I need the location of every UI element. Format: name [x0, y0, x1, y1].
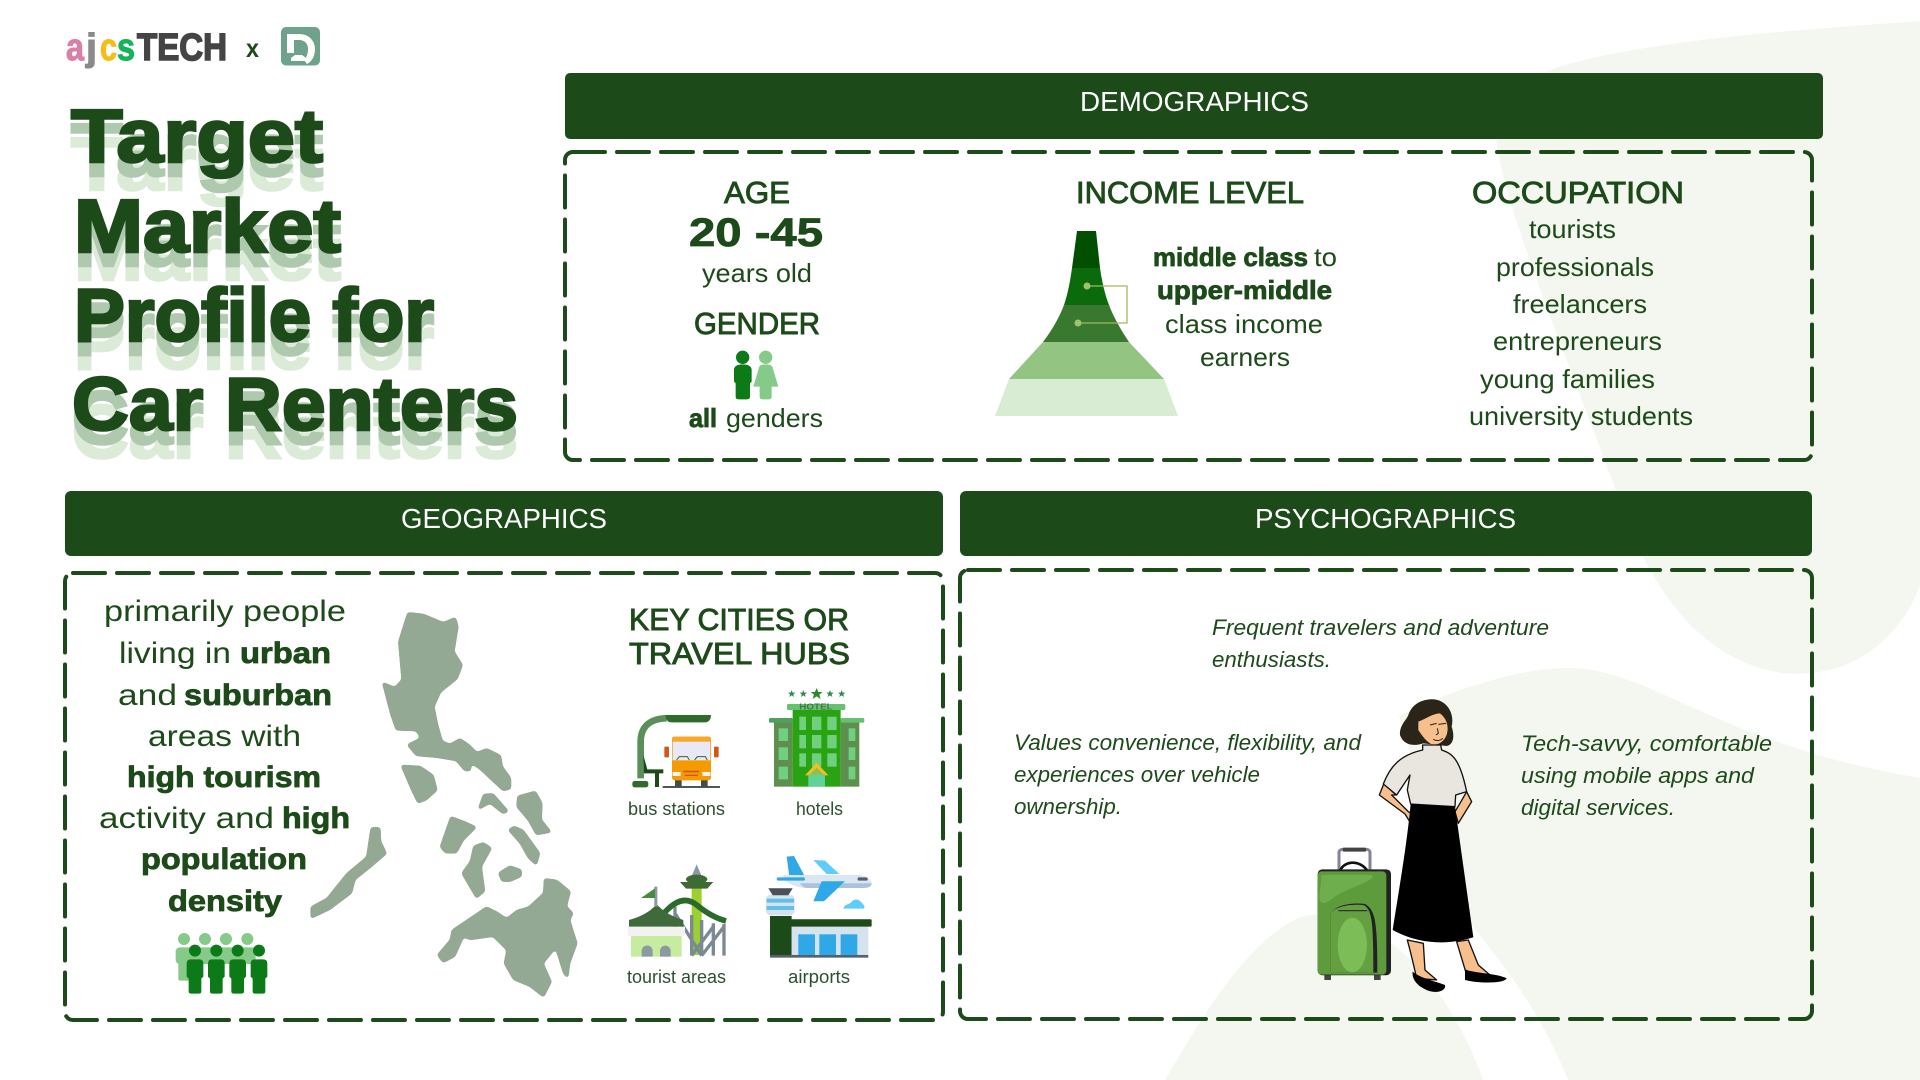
heading: psychographics [960, 491, 1812, 556]
heading: demographics: DEMOGRAPHICS [1080, 86, 1309, 117]
occupation block: tourists [1529, 214, 1616, 244]
income level block: to [1314, 242, 1337, 272]
gender block: GENDER [694, 306, 820, 341]
labels: travel hubs: bus stations [628, 799, 725, 819]
text block: where people live: and [118, 679, 177, 712]
title: Car Renters [72, 362, 518, 446]
logo: ajcsTECH x partner: s [117, 27, 135, 69]
panel: psychographics [960, 570, 1812, 1019]
logo: ajcsTECH x partner: x [246, 35, 259, 63]
income level block [995, 175, 1337, 416]
text: values: experiences over vehicle [1014, 762, 1260, 787]
occupation block: young families [1480, 364, 1655, 394]
text block: where people live: areas with [148, 720, 301, 753]
heading: geographics [65, 491, 943, 556]
age block [689, 175, 823, 288]
labels: travel hubs [627, 799, 850, 987]
occupation block: professionals [1496, 252, 1654, 282]
title: Target [71, 94, 323, 178]
income level block: upper-middle [1157, 275, 1332, 305]
labels: travel hubs: tourist areas [627, 967, 726, 987]
text: values [1014, 730, 1362, 819]
text: tech-savvy: using mobile apps and [1521, 763, 1755, 788]
occupation block: OCCUPATION [1472, 175, 1684, 210]
logo: ajcsTECH x partner: c [100, 27, 117, 69]
chart: income pyramid [995, 231, 1178, 416]
title: Target [71, 122, 323, 206]
text: travelers: Frequent travelers and adventure [1212, 615, 1549, 640]
heading: demographics [565, 73, 1823, 139]
icon: crowd of people [176, 933, 267, 994]
text: values: ownership. [1014, 794, 1122, 819]
income level block: INCOME LEVEL [1076, 175, 1304, 210]
text: travelers [1212, 615, 1549, 672]
gender block [689, 306, 823, 433]
panel: geographics [65, 573, 943, 1020]
title: Target [71, 108, 323, 192]
title: Market [74, 184, 341, 268]
logo: ajcsTECH x partner [66, 27, 320, 69]
map: Philippines [312, 613, 576, 996]
text block: where people live: urban [240, 637, 331, 670]
income level block: earners [1200, 342, 1290, 372]
occupation block: freelancers [1513, 289, 1647, 319]
heading: psychographics: PSYCHOGRAPHICS [1255, 503, 1516, 534]
heading: key cities or travel hubs [629, 602, 850, 671]
labels: travel hubs: hotels [796, 799, 843, 819]
heading: key cities or travel hubs: KEY CITIES OR [629, 602, 849, 637]
gender block: genders [726, 403, 823, 433]
text: travelers: enthusiasts. [1212, 647, 1331, 672]
title: Market [74, 198, 341, 282]
title: Profile for [74, 287, 434, 371]
occupation block [1469, 175, 1693, 431]
age block: years old [702, 258, 812, 288]
text block: where people live: high tourism [127, 761, 321, 794]
icon: hotel [769, 688, 864, 787]
labels: travel hubs: airports [788, 967, 850, 987]
icon: bus station [632, 715, 720, 788]
logo: ajcsTECH x partner: a [66, 27, 85, 69]
title: Car Renters [72, 390, 518, 474]
income level block: middle class [1153, 242, 1308, 272]
heading: geographics: GEOGRAPHICS [401, 503, 607, 534]
illustration: suitcase [1318, 848, 1391, 980]
logo: ajcsTECH x partner: j [85, 27, 97, 69]
text block: where people live: activity and [99, 802, 274, 835]
title: Car Renters [72, 376, 518, 460]
text: tech-savvy [1521, 731, 1772, 820]
text block: where people live: suburban [184, 679, 332, 712]
text block: where people live: primarily people [104, 595, 346, 628]
text: tech-savvy: Tech-savvy, comfortable [1521, 731, 1772, 756]
title: Profile for [74, 301, 434, 385]
icon: tourist area [628, 864, 726, 957]
age block: 20 -45 [689, 211, 823, 255]
text block: where people live: high [282, 802, 350, 835]
title: Profile for [74, 273, 434, 357]
text block: where people live: density [168, 885, 282, 918]
logo: ajcsTECH x partner: TECH [137, 27, 227, 69]
illustration: woman traveler [1379, 699, 1507, 992]
income level block: class income [1165, 309, 1323, 339]
text block: where people live: living in [119, 637, 231, 670]
icon: airport [766, 856, 872, 958]
panel: demographics [565, 152, 1812, 460]
icon: hotel: HOTEL [799, 702, 833, 712]
title [71, 94, 518, 474]
text: tech-savvy: digital services. [1521, 795, 1675, 820]
text block: where people live: population [141, 843, 307, 876]
occupation block: university students [1469, 401, 1693, 431]
occupation block: entrepreneurs [1493, 326, 1662, 356]
gender block: all [689, 403, 717, 433]
text: values: Values convenience, flexibility, and [1014, 730, 1362, 755]
text block: where people live [99, 595, 350, 918]
age block: AGE [724, 175, 790, 210]
title: Market [74, 212, 341, 296]
icon: man and woman [734, 351, 778, 399]
heading: key cities or travel hubs: TRAVEL HUBS [629, 636, 850, 671]
